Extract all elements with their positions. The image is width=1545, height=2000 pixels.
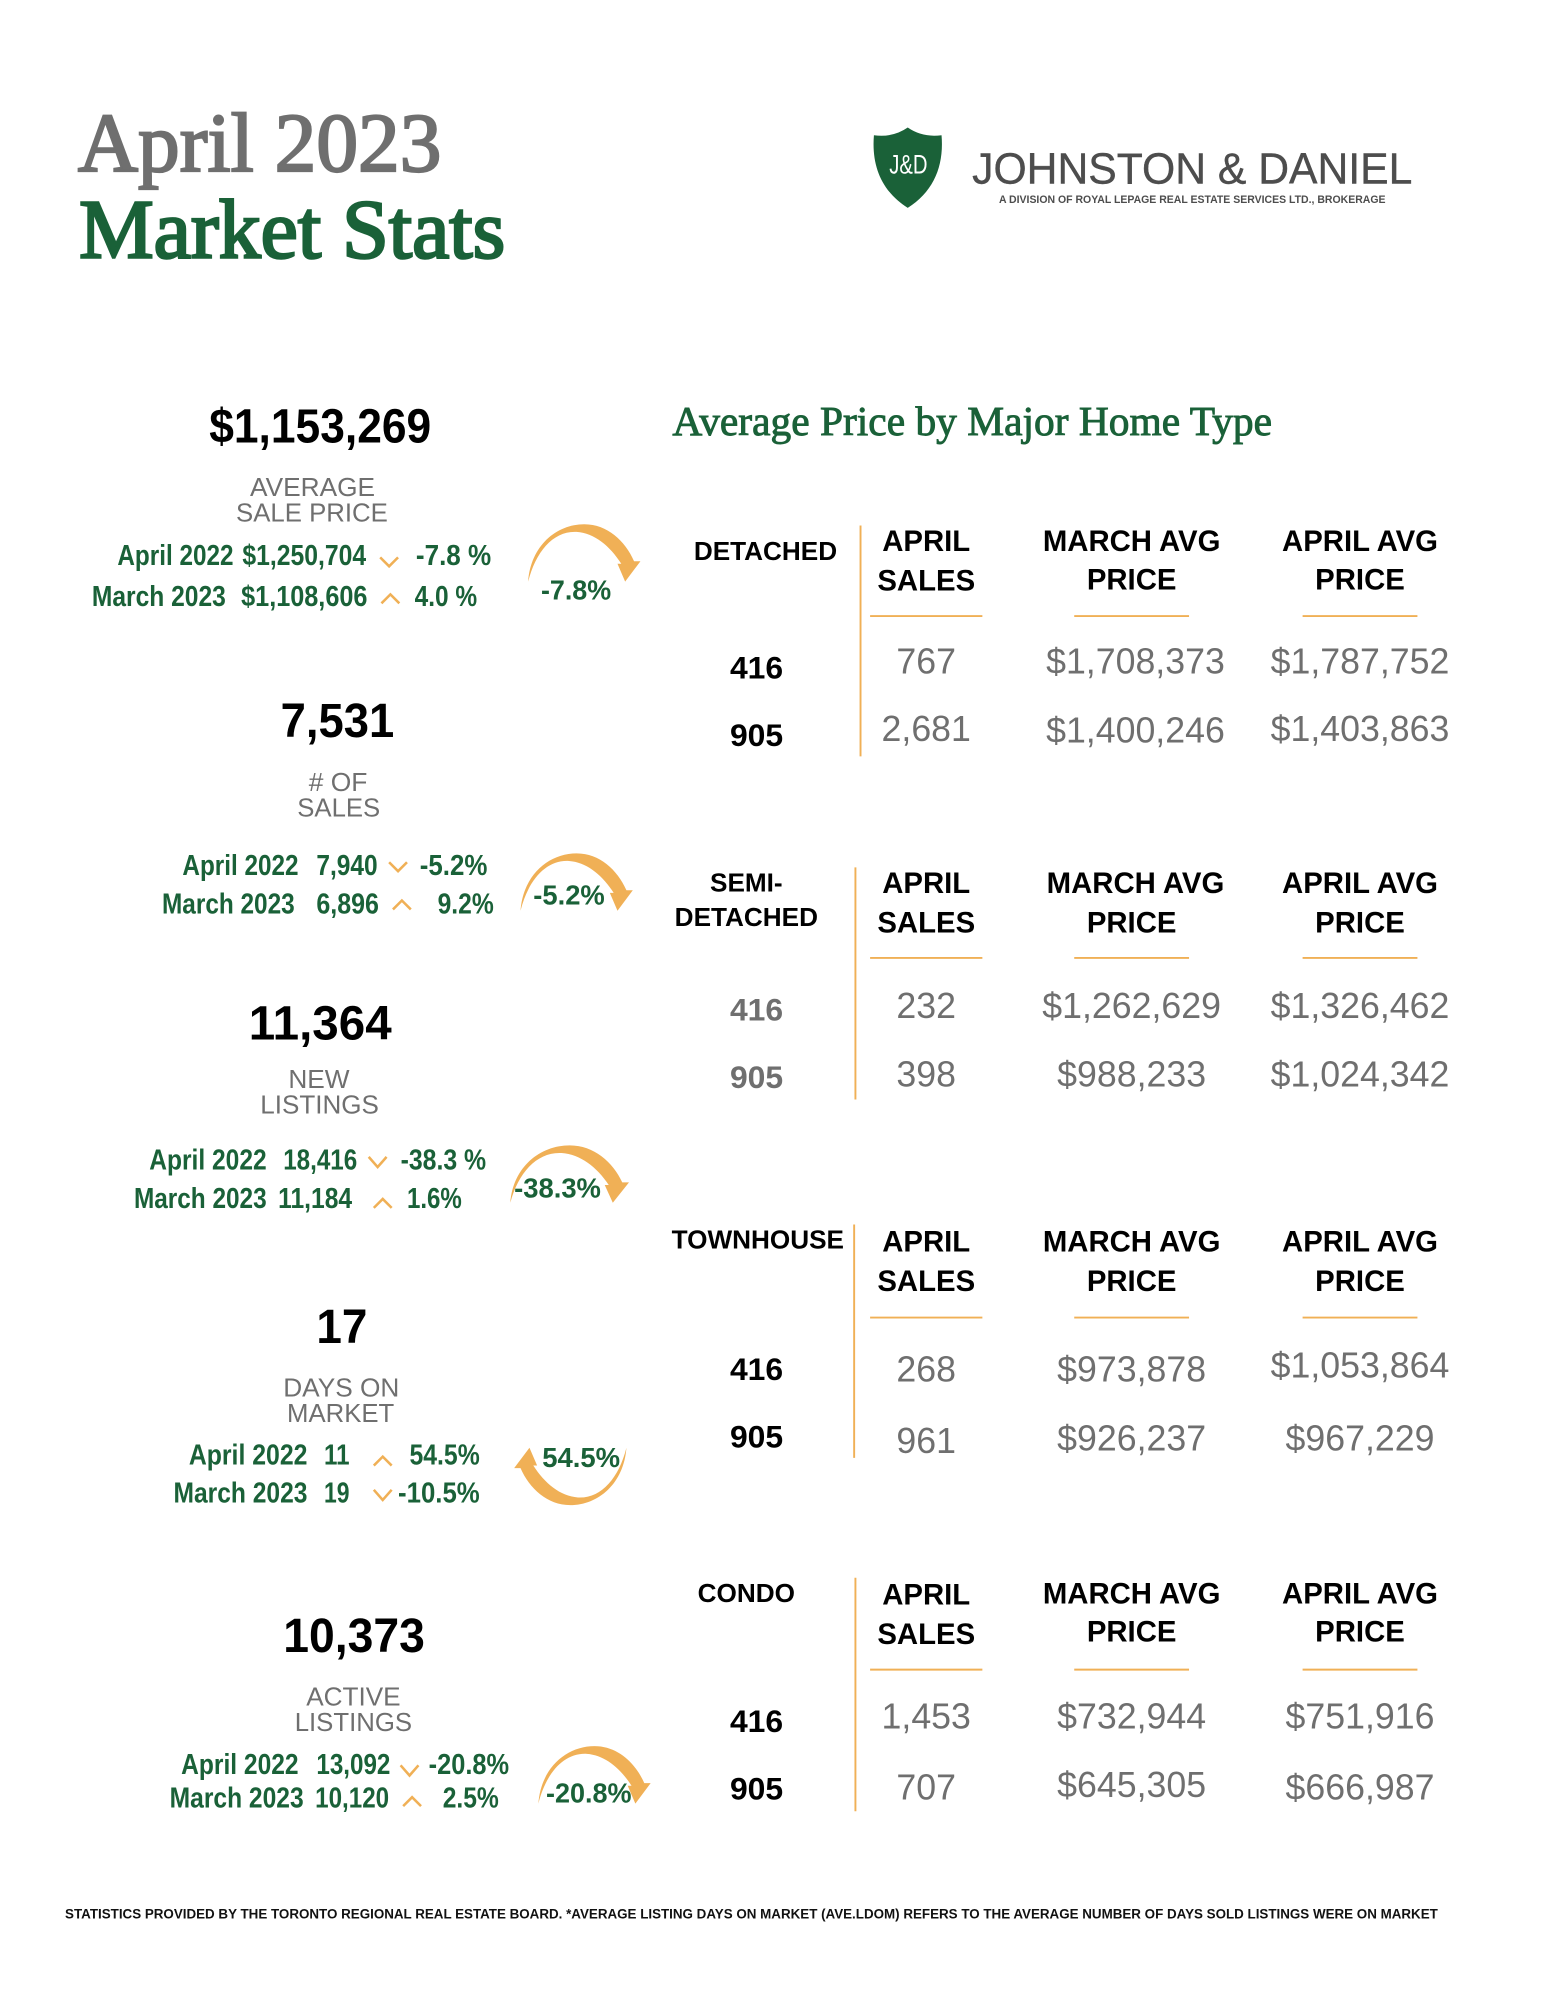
comparison rows: -7.8 %	[416, 540, 491, 572]
column headers: APRIL AVG	[1282, 867, 1438, 900]
footer note: STATISTICS PROVIDED BY THE TORONTO REGIONAL REAL ESTATE BOARD. *AVERAGE LISTING DAYS ON MARKET (AVE.LDOM) REFERS TO THE AVERAGE NUMBER OF DAYS SOLD LISTINGS WERE ON MARKET	[65, 1906, 1439, 1921]
column headers: PRICE	[1315, 1265, 1405, 1298]
big number: 11,364	[249, 997, 392, 1051]
comparison rows: 11	[324, 1439, 350, 1471]
comparison rows: 6,896	[316, 888, 379, 920]
comparison rows: April 2022	[181, 1749, 299, 1781]
row 416	[730, 641, 1449, 686]
comparison rows	[134, 1145, 486, 1215]
row 416: 232	[896, 986, 956, 1026]
row 416: 416	[730, 991, 783, 1027]
comparison rows: 11,184	[278, 1183, 352, 1215]
row 416: $1,326,462	[1271, 986, 1449, 1026]
comparison rows: 2.5%	[443, 1782, 499, 1814]
big number: $1,153,269	[209, 400, 431, 454]
row 416	[730, 1346, 1449, 1389]
comparison rows: $1,108,606	[241, 581, 367, 613]
row 905	[730, 1765, 1434, 1808]
row 416: 416	[730, 650, 783, 686]
row 905: 905	[730, 1419, 783, 1455]
column headers: SALES	[877, 906, 975, 939]
column headers: PRICE	[1087, 1265, 1176, 1298]
row 905: $1,403,863	[1271, 709, 1449, 749]
label: SALES	[297, 792, 380, 822]
comparison rows: 7,940	[316, 850, 378, 882]
row 905: 905	[730, 717, 783, 753]
arrow: curved down	[538, 1746, 651, 1804]
row 416: 416	[730, 1351, 783, 1387]
row 416: 268	[896, 1349, 956, 1389]
change label: 54.5%	[542, 1442, 620, 1473]
row 905: $926,237	[1057, 1418, 1206, 1458]
comparison rows: March 2023	[170, 1782, 304, 1814]
heading: average price by home type: Average Price by Major Home Type	[672, 399, 1272, 444]
change label: -7.8%	[541, 574, 611, 605]
label: DAYS ON	[283, 1373, 399, 1403]
comparison rows: March 2023	[174, 1478, 307, 1510]
row 905: 961	[896, 1421, 956, 1461]
category: TOWNHOUSE	[672, 1225, 844, 1255]
comparison rows: 13,092	[316, 1749, 390, 1781]
logo: Johnston & Daniel	[874, 128, 1412, 208]
arrow: curved down	[510, 1145, 629, 1203]
category: CONDO	[698, 1578, 795, 1608]
row 905: 2,681	[882, 709, 971, 749]
label	[297, 767, 380, 822]
panel: condo table	[698, 1577, 1438, 1811]
arrow: curved down	[521, 853, 633, 911]
label	[295, 1681, 412, 1737]
arrow: curved up	[514, 1448, 626, 1505]
logo tagline: A DIVISION OF ROYAL LEPAGE REAL ESTATE SERVICES LTD., BROKERAGE	[999, 194, 1386, 206]
row 905: 905	[730, 1771, 783, 1807]
change label: -5.2%	[533, 879, 605, 910]
comparison rows: April 2022	[149, 1145, 267, 1177]
label: LISTINGS	[260, 1090, 379, 1120]
title: April 2023	[78, 97, 441, 190]
comparison rows: -10.5%	[398, 1478, 480, 1510]
row 416: $1,787,752	[1271, 641, 1449, 681]
label: ACTIVE	[306, 1681, 401, 1711]
label	[283, 1373, 399, 1428]
label: NEW	[288, 1064, 350, 1094]
row 416	[730, 1696, 1434, 1739]
comparison rows: March 2023	[92, 581, 226, 613]
label	[260, 1064, 379, 1120]
row 905: $967,229	[1286, 1418, 1434, 1458]
comparison rows: April 2022	[117, 540, 233, 572]
column headers: PRICE	[1315, 906, 1405, 939]
panel: average sale price	[92, 400, 640, 613]
panel: number of sales	[162, 694, 633, 920]
comparison rows	[92, 540, 491, 613]
column headers: MARCH AVG	[1043, 1225, 1220, 1258]
big number: 10,373	[283, 1609, 425, 1663]
label: # OF	[309, 767, 367, 797]
column headers: SALES	[877, 565, 975, 598]
panel: days on market	[174, 1300, 626, 1510]
comparison rows: -38.3 %	[401, 1145, 486, 1177]
column headers: APRIL	[882, 1579, 970, 1612]
column headers	[877, 1225, 1438, 1298]
row 416: 416	[730, 1703, 783, 1739]
comparison rows: 1.6%	[407, 1183, 462, 1215]
comparison rows	[174, 1439, 480, 1510]
arrow: curved down	[528, 524, 640, 582]
comparison rows: 18,416	[283, 1145, 357, 1177]
row 416: $1,262,629	[1042, 986, 1221, 1026]
column headers: APRIL	[882, 1225, 970, 1258]
column headers: SALES	[877, 1265, 975, 1298]
panel: detached table	[694, 525, 1449, 756]
column headers	[877, 867, 1438, 939]
row 416: $973,878	[1057, 1349, 1206, 1389]
category: DETACHED	[694, 536, 837, 566]
label	[236, 472, 388, 528]
comparison rows: April 2022	[182, 850, 299, 882]
row 416	[730, 986, 1449, 1027]
comparison rows: $1,250,704	[242, 540, 366, 572]
row 905: 398	[896, 1055, 956, 1095]
title	[78, 97, 505, 277]
column headers: APRIL AVG	[1282, 525, 1438, 558]
row 905: $645,305	[1057, 1765, 1206, 1805]
row 416: $1,708,373	[1046, 641, 1225, 681]
category: DETACHED	[675, 902, 818, 932]
comparison rows: April 2022	[189, 1439, 307, 1471]
comparison rows: 54.5%	[410, 1439, 480, 1471]
column headers: MARCH AVG	[1043, 525, 1220, 558]
comparison rows: -5.2%	[420, 850, 487, 882]
comparison rows: 10,120	[315, 1782, 389, 1814]
column headers: PRICE	[1087, 906, 1176, 939]
row 905	[730, 1418, 1434, 1461]
logo wordmark: JOHNSTON & DANIEL	[972, 146, 1412, 194]
icon: shield	[874, 128, 942, 208]
row 905: $1,400,246	[1046, 710, 1225, 750]
column headers: APRIL AVG	[1282, 1225, 1438, 1258]
panel: townhouse table	[672, 1224, 1449, 1461]
comparison rows	[162, 850, 494, 920]
big number: 17	[316, 1300, 367, 1354]
big number: 7,531	[281, 694, 394, 748]
row 905: 905	[730, 1059, 783, 1095]
comparison rows: -20.8%	[429, 1749, 509, 1781]
icon: shield: J&D	[889, 149, 928, 179]
column headers: APRIL	[882, 867, 970, 900]
category	[675, 868, 818, 932]
label: SALE PRICE	[236, 498, 388, 528]
row 905	[730, 1055, 1449, 1095]
row 905: 707	[896, 1768, 956, 1808]
category: SEMI-	[710, 868, 783, 898]
comparison rows: March 2023	[162, 888, 295, 920]
column headers: PRICE	[1087, 1616, 1176, 1649]
panel: active listings	[170, 1609, 651, 1814]
label: LISTINGS	[295, 1707, 412, 1737]
comparison rows: 4.0 %	[415, 581, 477, 613]
row 416: 767	[896, 641, 956, 681]
label: MARKET	[287, 1398, 394, 1428]
row 905	[730, 709, 1449, 753]
column headers: APRIL	[882, 525, 970, 558]
comparison rows	[170, 1749, 509, 1814]
column headers: PRICE	[1087, 563, 1176, 596]
panel: semi-detached table	[675, 867, 1449, 1099]
row 905: $666,987	[1286, 1768, 1434, 1808]
comparison rows: 19	[324, 1478, 350, 1510]
row 416: $1,053,864	[1271, 1346, 1449, 1386]
title: Market Stats	[79, 184, 505, 277]
change label: -38.3%	[514, 1173, 601, 1204]
row 905: $988,233	[1057, 1055, 1206, 1095]
row 416: 1,453	[882, 1696, 971, 1736]
change label: -20.8%	[546, 1777, 632, 1808]
panel: new listings	[134, 997, 629, 1215]
column headers: PRICE	[1315, 563, 1405, 596]
row 416: $751,916	[1286, 1696, 1434, 1736]
column headers: PRICE	[1315, 1616, 1405, 1649]
comparison rows: March 2023	[134, 1183, 267, 1215]
column headers: SALES	[877, 1618, 975, 1651]
column headers: APRIL AVG	[1282, 1577, 1438, 1610]
row 416: $732,944	[1057, 1696, 1206, 1736]
column headers	[877, 525, 1438, 598]
comparison rows: 9.2%	[438, 888, 494, 920]
column headers: MARCH AVG	[1043, 1577, 1220, 1610]
column headers: MARCH AVG	[1047, 867, 1224, 900]
column headers	[877, 1577, 1438, 1651]
label: AVERAGE	[250, 472, 375, 502]
row 905: $1,024,342	[1271, 1055, 1449, 1095]
